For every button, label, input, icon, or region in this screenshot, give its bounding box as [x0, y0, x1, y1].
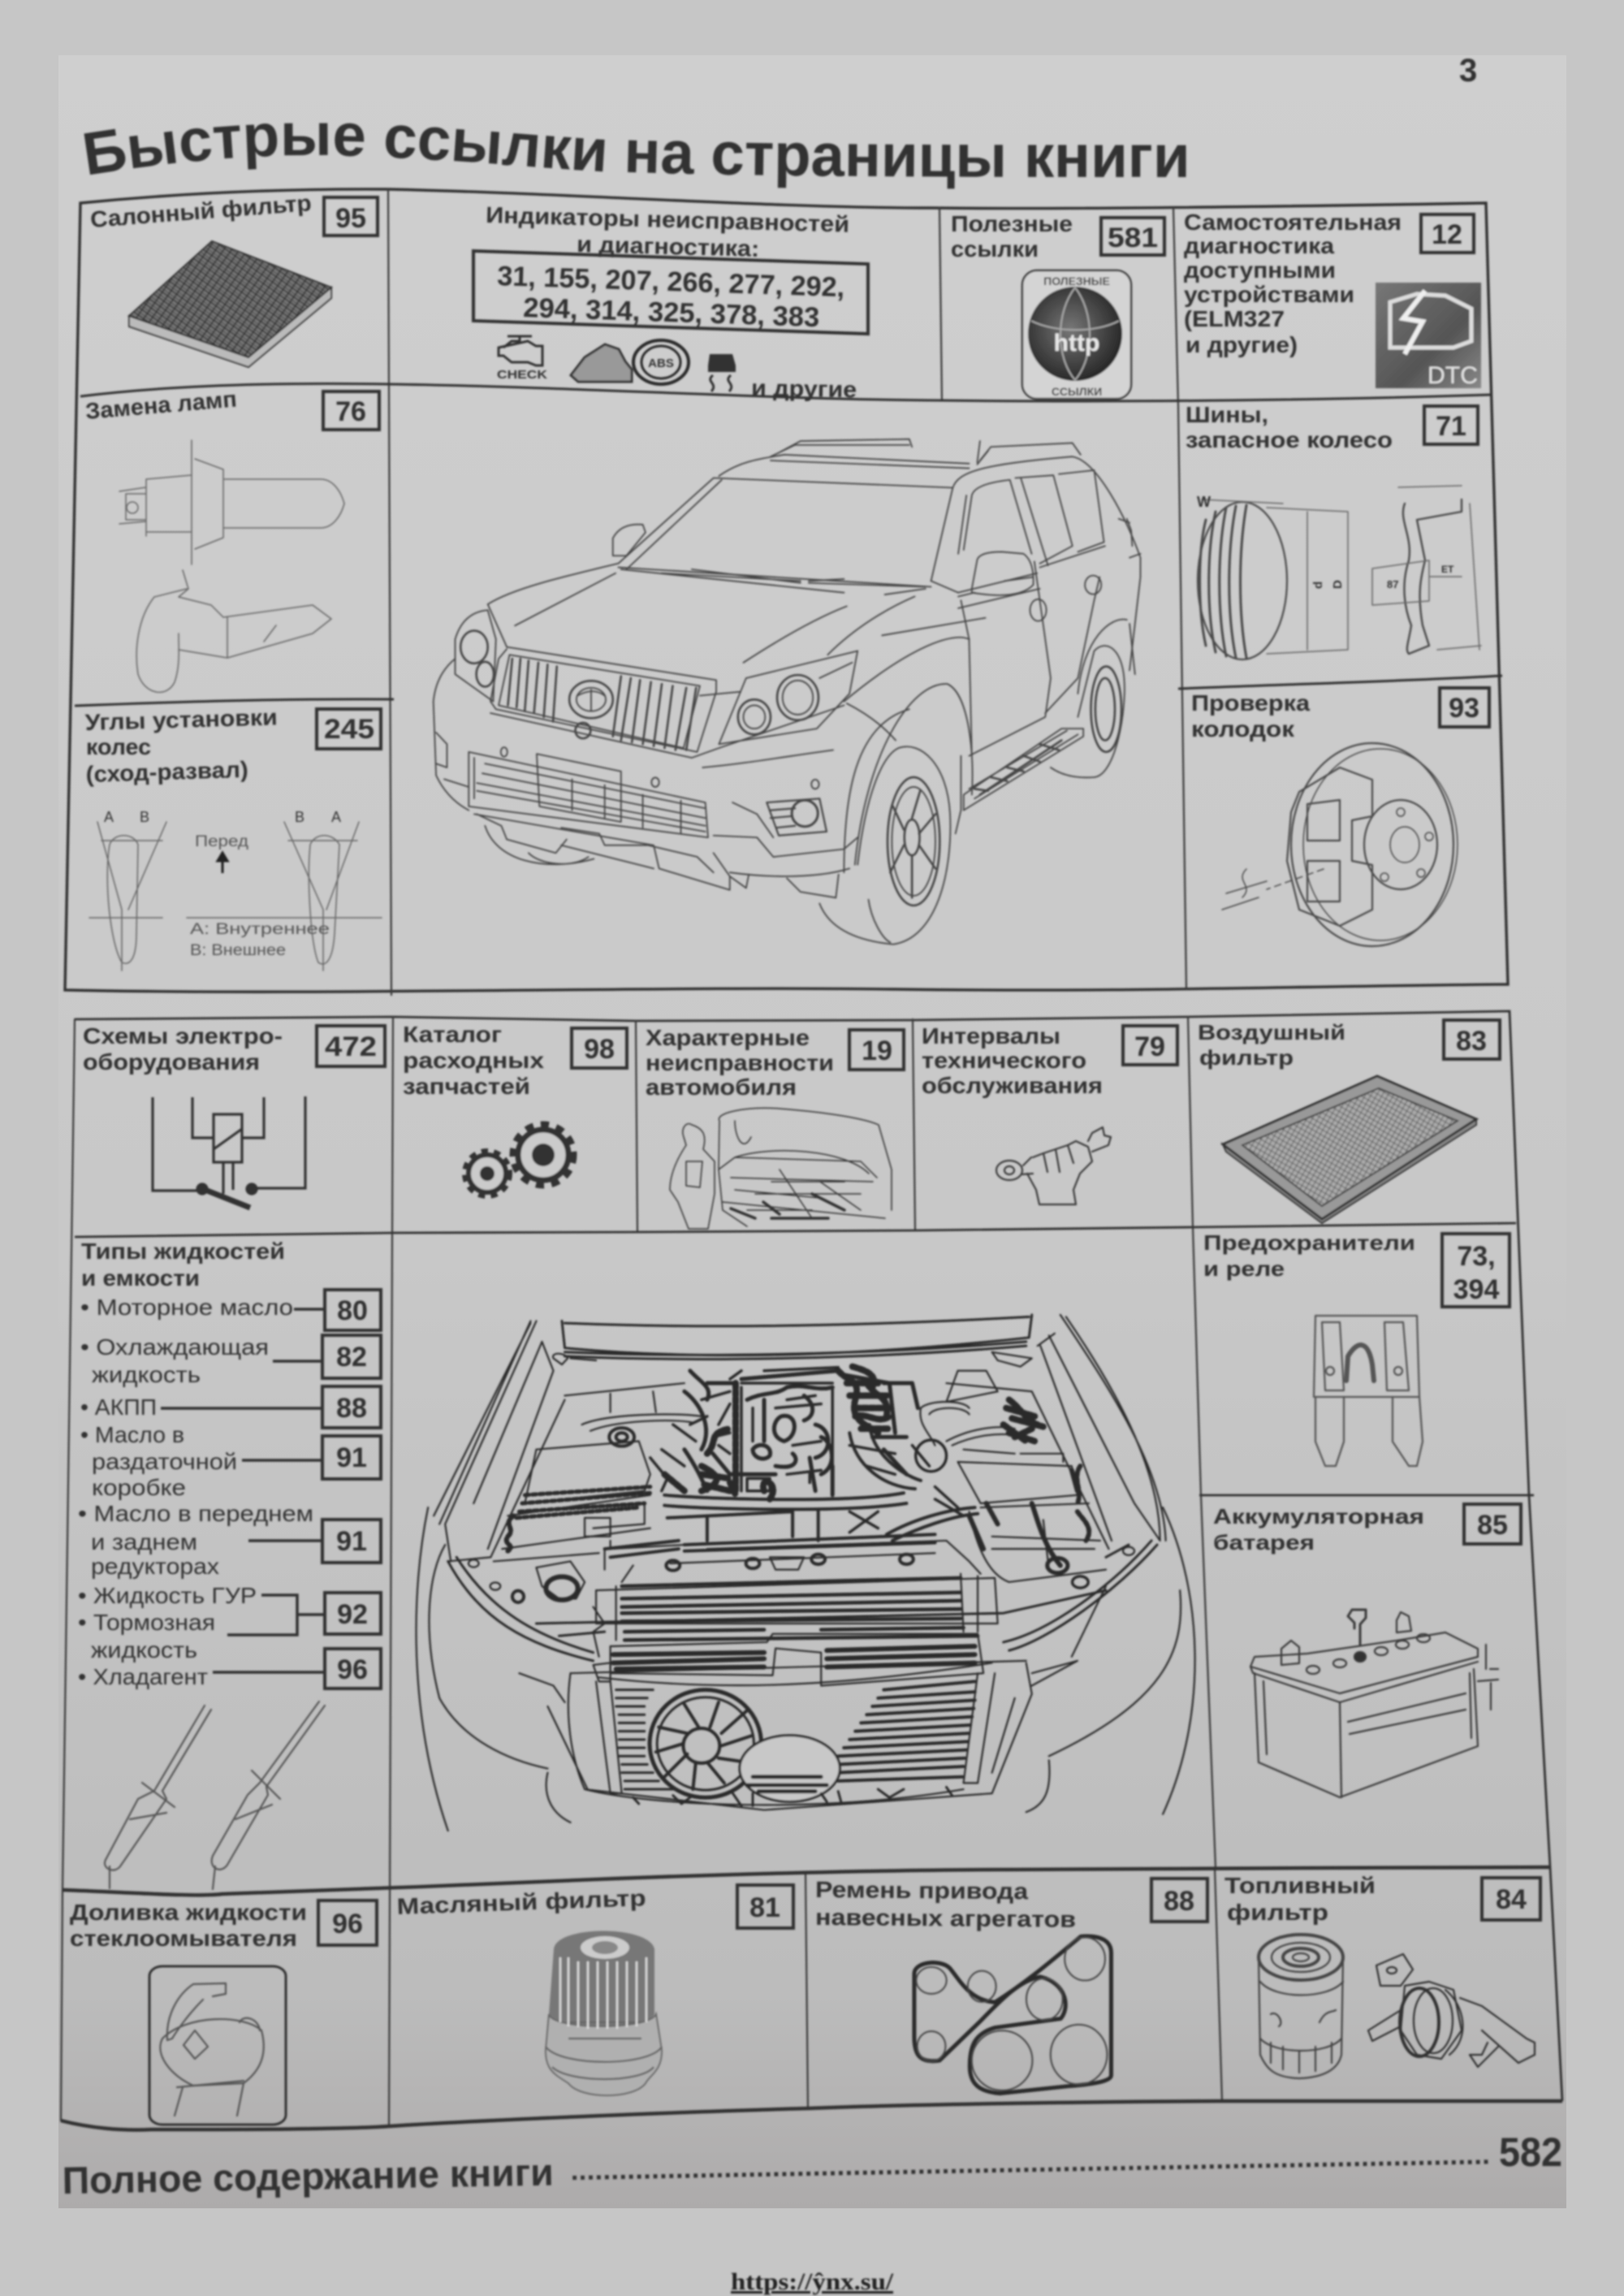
icon: DTC: DTC	[1427, 362, 1478, 389]
panel: fuses and relays	[1203, 1230, 1510, 1466]
icon: DTC	[1376, 283, 1481, 389]
list: fluid names: жидкость	[92, 1362, 201, 1387]
heading: typical faults: неисправности	[646, 1050, 834, 1075]
radiator	[594, 1574, 998, 1657]
illustration: engine bay	[417, 1315, 1195, 1831]
page ref 81: 81	[749, 1892, 780, 1923]
heading: service intervals: обслуживания	[922, 1073, 1103, 1098]
page ref 85: 85	[1477, 1510, 1508, 1541]
heading: typical faults: автомобиля	[646, 1074, 797, 1100]
diagram: alignment right wheel: В	[295, 809, 304, 825]
page ref 93: 93	[1449, 693, 1479, 724]
heading: useful links: ссылки	[951, 236, 1039, 262]
diagram: alignment left wheel	[89, 809, 166, 971]
hoses	[605, 1425, 978, 1557]
heading: battery: батарея	[1213, 1530, 1315, 1554]
page ref 12: 12	[1432, 219, 1462, 250]
page ref 472: 472	[325, 1031, 377, 1062]
diagram: alignment left wheel: В	[140, 809, 149, 825]
page ref 95: 95	[335, 203, 366, 234]
panel: cabin filter	[89, 190, 378, 367]
heading: self diagnostics: и другие)	[1186, 332, 1298, 357]
page ref 83	[1444, 1020, 1500, 1059]
page ref 581	[1101, 218, 1164, 255]
panel: wiring diagrams	[83, 1023, 385, 1208]
icon: mechanic and open hood	[670, 1108, 892, 1229]
page ref 19	[849, 1030, 904, 1070]
heading: washer fluid	[70, 1900, 307, 1951]
page ref 91 differentials: 91	[336, 1526, 367, 1557]
heading: parts catalogue: Каталог	[403, 1022, 502, 1047]
page refs box	[473, 251, 868, 334]
heading: fuses and relays: Предохранители	[1203, 1230, 1415, 1255]
frame: lower section	[61, 1011, 1562, 2130]
diagram: tyre: D	[1331, 580, 1345, 589]
text: forward	[195, 833, 248, 873]
heading: self diagnostics: диагностика	[1184, 233, 1334, 258]
icon: H4 bulb	[119, 440, 344, 564]
diagram: wheel rim: 87	[1387, 578, 1398, 590]
dot leader: ..................................................................................................................	[570, 2139, 1490, 2186]
heading: parts catalogue	[403, 1022, 544, 1099]
title: Быстрые ссылки на страницы книги	[83, 122, 1187, 190]
heading: fluids and capacities	[81, 1239, 285, 1291]
page ref 92	[325, 1593, 381, 1634]
heading: fuel filter	[1224, 1873, 1376, 1925]
heading: wiring diagrams: Схемы электро-	[83, 1023, 283, 1049]
heading: drive belt	[815, 1877, 1076, 1932]
panel: battery	[1213, 1504, 1521, 1797]
page ref 88	[322, 1386, 381, 1428]
list: fluid names: • АКПП	[80, 1394, 157, 1420]
page ref 88: 88	[1164, 1886, 1194, 1917]
heading: wheel alignment: (сход-развал)	[85, 757, 248, 787]
heading: self diagnostics: Самостоятельная	[1184, 210, 1402, 235]
icon: skid	[708, 354, 736, 391]
panel: washer fluid top-up	[70, 1900, 377, 2125]
heading: brake pads: колодок	[1191, 716, 1295, 742]
panel: self diagnostics	[1184, 210, 1481, 389]
heading: useful links: Полезные	[951, 211, 1073, 236]
heading: cabin filter: Салонный фильтр	[89, 190, 313, 232]
diagram: tyre: d	[1311, 582, 1325, 589]
diagram: wheel rim	[1372, 486, 1481, 654]
page ref 80	[325, 1290, 381, 1330]
diagram: alignment left wheel: А	[104, 809, 114, 825]
diagram: tyre: W	[1197, 494, 1211, 510]
heading: fuses and relays: и реле	[1203, 1256, 1285, 1281]
heading: brake pads: Проверка	[1191, 690, 1310, 716]
page ref 71: 71	[1436, 411, 1466, 442]
panel: service intervals	[922, 1023, 1177, 1204]
page ref 91 transfer case: 91	[336, 1442, 367, 1473]
panel: wheel alignment	[84, 704, 382, 971]
heading: air filter: Воздушный	[1198, 1020, 1345, 1044]
heading: parts catalogue: запчастей	[403, 1074, 530, 1099]
heading: fuel filter: фильтр	[1227, 1900, 1328, 1925]
icon: car on slope	[571, 344, 632, 382]
heading: wiring diagrams	[83, 1023, 283, 1074]
page ref 84: 84	[1496, 1884, 1527, 1915]
illustration: SUV	[434, 439, 1140, 945]
page ref 88: 88	[336, 1393, 367, 1424]
panel: tyres and spare wheel	[1186, 402, 1481, 659]
heading: air filter	[1198, 1020, 1345, 1070]
page ref 82	[322, 1335, 381, 1378]
panel: fault indicators	[473, 202, 868, 402]
icon: oil filter	[546, 1931, 662, 2095]
list: fluid names: коробке	[92, 1475, 186, 1500]
heading: drive belt: навесных агрегатов	[815, 1905, 1076, 1932]
heading: battery: Аккумуляторная	[1213, 1504, 1424, 1529]
page refs box: 31, 155, 207, 266, 277, 292,	[497, 261, 845, 303]
heading: wheel alignment: Углы установки	[84, 704, 278, 735]
list: fluid names: • Тормозная	[78, 1610, 215, 1635]
heading: typical faults: Характерные	[646, 1025, 810, 1050]
heading: typical faults	[646, 1025, 834, 1100]
heading: self diagnostics	[1184, 210, 1402, 357]
page ref 71	[1424, 406, 1478, 444]
icon: fuel filter canister	[1259, 1935, 1343, 2078]
page ref 19: 19	[862, 1036, 892, 1066]
page ref 96	[318, 1900, 377, 1945]
list: fluid names: редукторах	[91, 1554, 219, 1579]
heading: washer fluid: стеклоомывателя	[70, 1926, 297, 1951]
heading: battery	[1213, 1504, 1424, 1554]
icon: ABS	[633, 340, 689, 384]
heading: indicators: Индикаторы неисправностей	[486, 202, 850, 237]
legend: inner outer	[190, 921, 330, 959]
legend: inner outer: В: Внешнее	[190, 942, 286, 959]
page ref 82: 82	[336, 1342, 367, 1373]
page number: 3	[1459, 53, 1477, 89]
panel: useful links	[951, 211, 1164, 399]
heading: wheel alignment: колес	[86, 734, 151, 759]
source link: https://ŷnx.su/	[731, 2268, 894, 2295]
icon: globe http	[1022, 270, 1131, 399]
text: forward: Перед	[195, 833, 248, 850]
heading: washer fluid: Доливка жидкости	[70, 1900, 307, 1925]
heading: air filter: фильтр	[1199, 1045, 1294, 1070]
heading: self diagnostics: доступными	[1184, 257, 1336, 283]
icon: check engine: CHECK	[497, 368, 547, 382]
icon: H7 bulb	[136, 570, 331, 692]
page ref 84	[1482, 1878, 1540, 1920]
heading: tyres: запасное колесо	[1186, 427, 1393, 452]
heading: useful links	[951, 211, 1073, 262]
heading: self diagnostics: (ELM327	[1184, 306, 1285, 331]
list: fluid names	[78, 1295, 313, 1689]
icon: relay circuit	[153, 1096, 305, 1208]
page ref 83: 83	[1456, 1026, 1487, 1057]
panel: fuel filter	[1224, 1873, 1540, 2078]
icon: globe http: ССЫЛКИ	[1052, 385, 1102, 398]
page number 582: 582	[1499, 2130, 1562, 2175]
panel: air filter	[1198, 1020, 1500, 1223]
heading: oil filter: Масляный фильтр	[396, 1885, 646, 1919]
icon: cabin filter	[129, 241, 331, 367]
panel: brake pads	[1191, 688, 1489, 946]
page ref 96: 96	[332, 1909, 363, 1939]
heading: fuel filter: Топливный	[1224, 1873, 1376, 1898]
heading: service intervals: Интервалы	[922, 1023, 1060, 1049]
list: fluid names: • Моторное масло	[80, 1295, 293, 1320]
page ref 98: 98	[584, 1034, 615, 1065]
heading: wiring diagrams: оборудования	[83, 1049, 260, 1074]
full contents line	[62, 2130, 1562, 2202]
frame: upper section	[65, 189, 1508, 995]
diagram: tyre	[1197, 494, 1348, 659]
page ref 96: 96	[337, 1654, 368, 1685]
diagram: alignment right wheel	[187, 809, 382, 971]
icon: battery	[1250, 1610, 1498, 1797]
heading: brake pads	[1191, 690, 1310, 742]
leader lines	[161, 1309, 325, 1672]
page ref 91 transfer case	[322, 1436, 381, 1479]
heading: full contents: Полное содержание книги	[62, 2150, 554, 2202]
page ref 85	[1464, 1504, 1521, 1544]
page ref 245	[317, 709, 381, 749]
page ref 80: 80	[337, 1295, 368, 1326]
heading: wheel alignment	[84, 704, 278, 787]
panel: typical faults	[646, 1025, 904, 1229]
page ref 73, 394	[1442, 1234, 1510, 1307]
page ref 79: 79	[1134, 1031, 1165, 1062]
page ref 472	[317, 1026, 385, 1066]
page ref 73, 394: 394	[1453, 1274, 1499, 1305]
heading: service intervals	[922, 1023, 1103, 1098]
heading: tyres	[1186, 402, 1393, 452]
heading: tyres: Шины,	[1186, 402, 1268, 427]
heading: fluids and capacities: Типы жидкостей	[81, 1239, 285, 1264]
page ref 81	[737, 1885, 793, 1928]
page ref 88	[1151, 1879, 1207, 1922]
page ref 12	[1421, 214, 1474, 253]
page ref 93	[1440, 688, 1489, 727]
page ref 91 differentials	[322, 1520, 381, 1563]
icon: washer cap	[149, 1966, 286, 2125]
icon: inline fuel pump	[1368, 1954, 1535, 2067]
page ref 76	[323, 391, 379, 430]
diagram: wheel rim: ET	[1441, 564, 1454, 575]
page ref 95	[324, 197, 378, 236]
panel: bulb replacement	[84, 386, 379, 692]
list: fluid names: • Масло в переднем	[78, 1501, 313, 1526]
heading: service intervals: технического	[922, 1048, 1086, 1073]
page ref 79	[1123, 1026, 1177, 1065]
panel: fluids	[78, 1239, 381, 1889]
icon: gears	[465, 1125, 573, 1196]
page ref 96	[325, 1649, 381, 1688]
icon: globe http: http	[1054, 330, 1099, 357]
page ref 92: 92	[337, 1599, 368, 1630]
icon: globe http: ПОЛЕЗНЫЕ	[1043, 275, 1110, 288]
heading: indicators	[486, 202, 850, 262]
heading: fuses and relays	[1203, 1230, 1415, 1281]
page ref 73, 394: 73,	[1457, 1241, 1496, 1272]
diagram: alignment right wheel: А	[331, 809, 341, 825]
legend: inner outer: А: Внутреннее	[190, 921, 330, 938]
page ref 245: 245	[324, 714, 374, 745]
heading: self diagnostics: устройствами	[1184, 282, 1354, 307]
heading: fluids and capacities: и емкости	[81, 1265, 200, 1291]
page ref 76: 76	[335, 396, 366, 427]
list: fluid names: • Охлаждающая	[80, 1334, 269, 1360]
page refs box: 294, 314, 325, 378, 383	[523, 292, 820, 333]
icon: dipsticks	[105, 1701, 325, 1889]
list: fluid names: • Масло в	[80, 1422, 184, 1447]
list: fluid names: раздаточной	[92, 1449, 237, 1474]
heading: indicators: и диагностика:	[577, 231, 760, 262]
icon: fuse	[1314, 1316, 1423, 1466]
diagram: belt routing	[914, 1936, 1111, 2094]
heading: parts catalogue: расходных	[403, 1048, 544, 1073]
engine cluster	[664, 1367, 1043, 1499]
list: fluid names: и заднем	[91, 1529, 197, 1554]
heading: bulb replacement: Замена ламп	[84, 386, 238, 424]
icon: check engine	[497, 336, 547, 382]
panel: oil filter	[396, 1885, 793, 2095]
page ref 98	[572, 1028, 627, 1068]
icon: wrench in fist	[996, 1127, 1111, 1204]
icon: ABS: ABS	[648, 357, 674, 370]
list: fluid names: жидкость	[91, 1637, 197, 1663]
page ref 581: 581	[1108, 223, 1158, 253]
panel: drive belt	[815, 1877, 1207, 2094]
panel: parts catalogue	[403, 1022, 627, 1196]
list: fluid names: • Жидкость ГУР	[78, 1583, 257, 1608]
text: and others: и другие	[751, 375, 857, 402]
diagram: brake caliper	[1222, 743, 1458, 946]
list: fluid names: • Хладагент	[78, 1664, 208, 1689]
icon: air filter	[1223, 1076, 1476, 1223]
heading: drive belt: Ремень привода	[815, 1877, 1029, 1904]
